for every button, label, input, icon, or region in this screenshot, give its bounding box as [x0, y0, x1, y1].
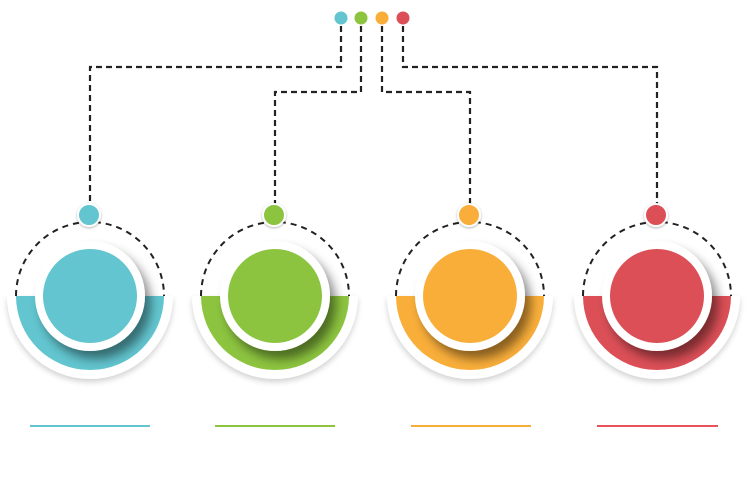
- item 4: red circle: [574, 204, 740, 379]
- bottom underlines: [30, 425, 718, 427]
- item 2: green circle: [192, 204, 358, 379]
- item 1: teal circle: [7, 204, 173, 379]
- connectors: dashed lines: [90, 26, 657, 204]
- top dots: [334, 12, 410, 24]
- item 3: orange circle: [387, 204, 553, 379]
